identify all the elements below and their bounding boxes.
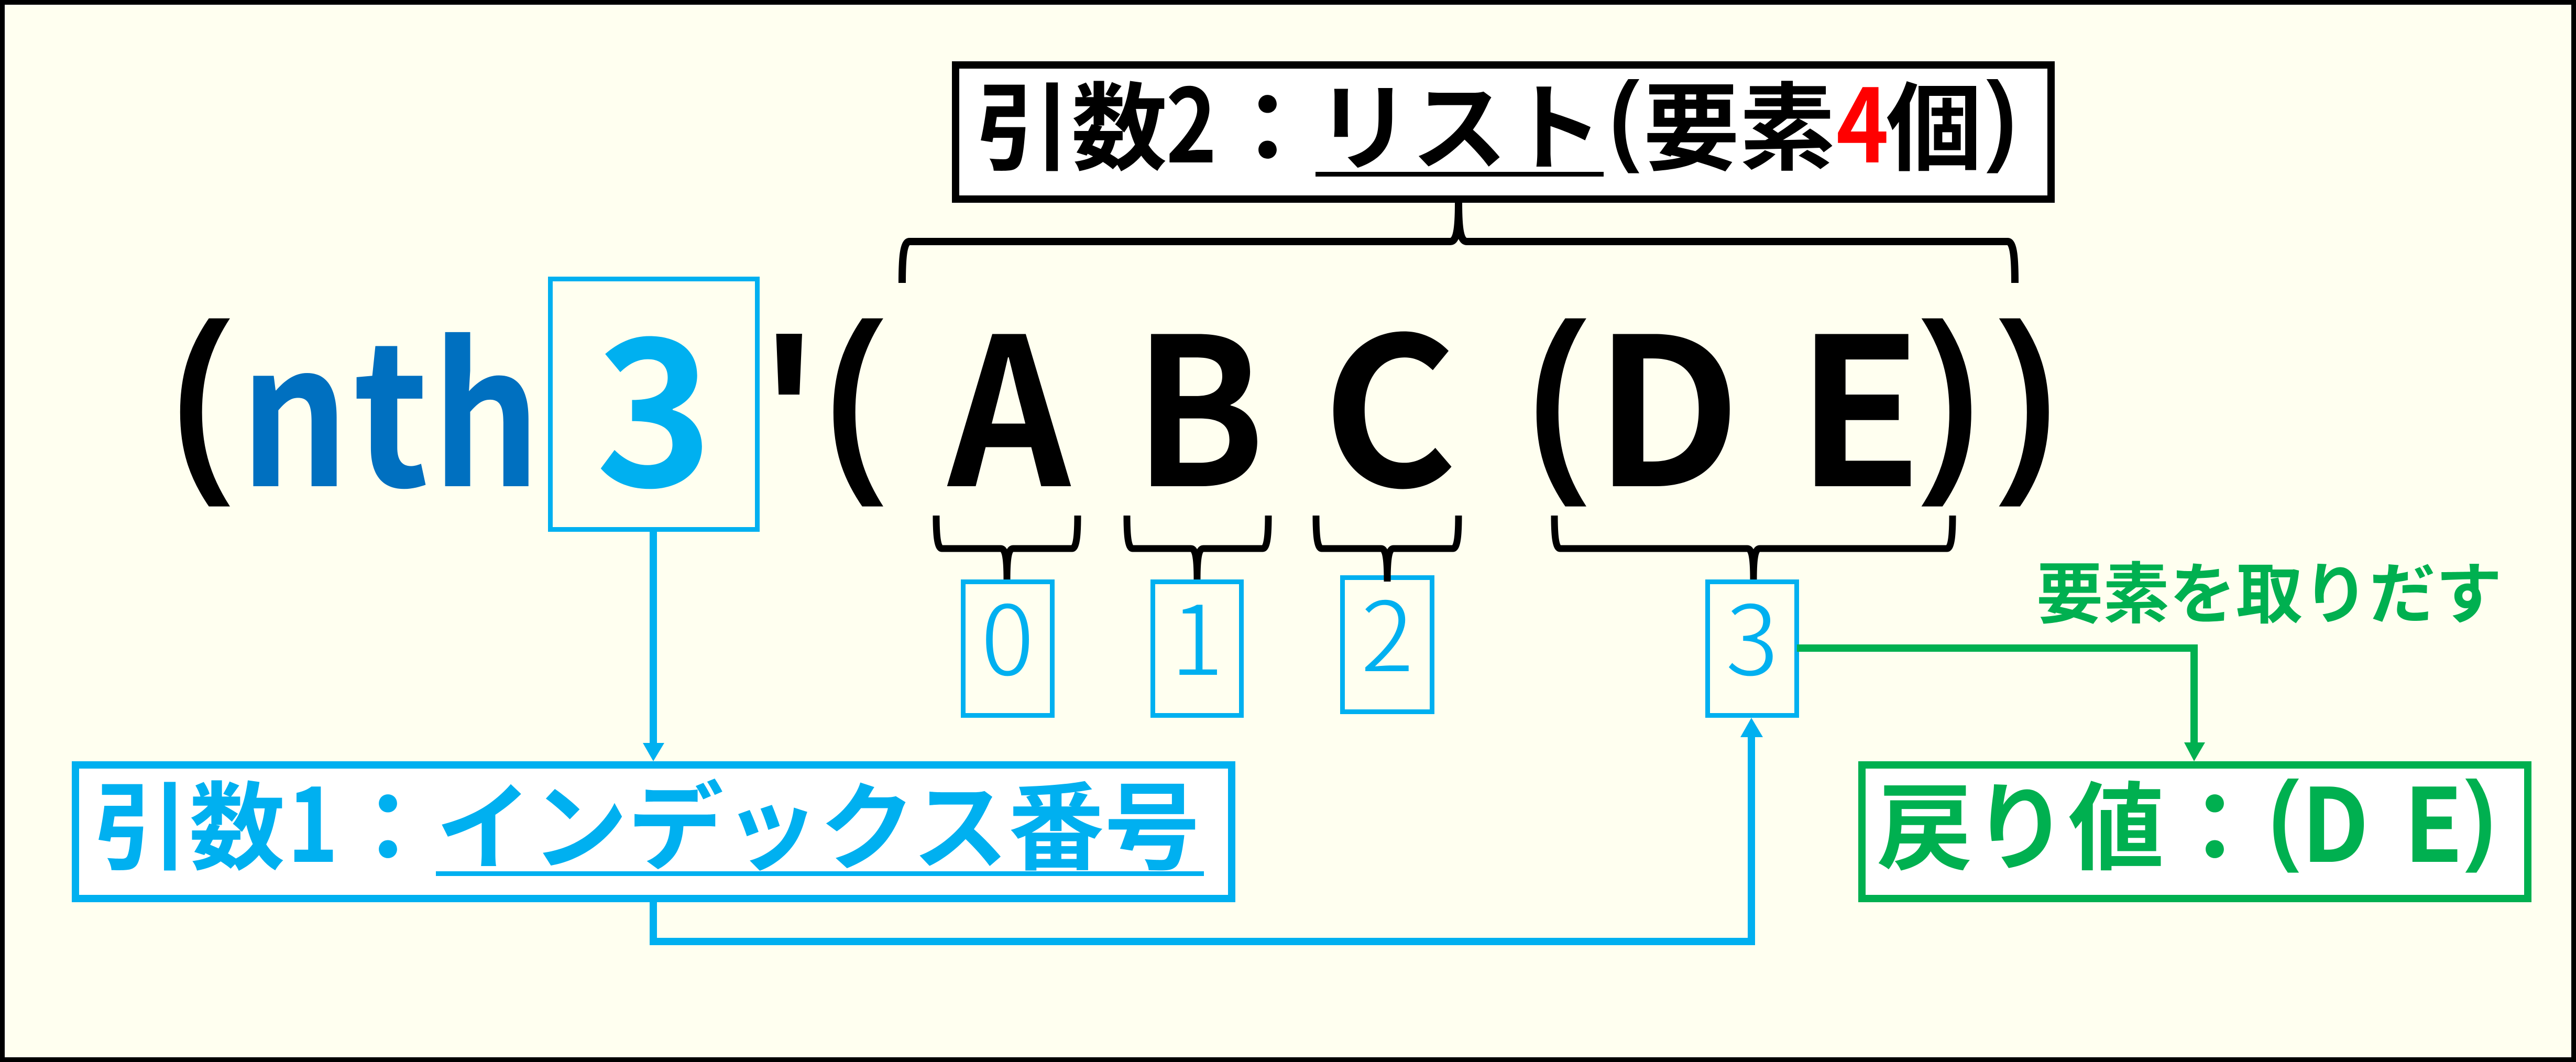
code: opening paren and nth xyxy=(167,257,541,543)
code: quote and list elements: ( xyxy=(820,278,892,512)
code: opening paren and nth: h xyxy=(432,263,541,542)
code: quote and list elements: D xyxy=(1594,248,1741,545)
panel: return value: ) xyxy=(2463,759,2497,874)
panel: argument 2 list label: ： xyxy=(1220,51,1316,190)
index box 3: 3 xyxy=(1725,562,1779,705)
panel: argument 2 list label: 引数 xyxy=(975,51,1167,190)
arrow: argument 1 to index box 3 xyxy=(653,718,1763,941)
arrow: index 3 down to argument 1 xyxy=(643,529,664,761)
index box 1: 1 xyxy=(1170,562,1224,705)
code: quote and list elements: ) xyxy=(1915,278,1985,512)
panel: argument 1 index number label: 1 xyxy=(287,744,338,891)
index box 0: 0 xyxy=(980,562,1035,705)
brace: sublist D E xyxy=(1554,516,1953,579)
code: quote and list elements: ' xyxy=(766,281,812,553)
panel: return value: D xyxy=(2301,744,2369,891)
index box 1 xyxy=(1153,562,1242,716)
panel: return value: 戻り値 xyxy=(1877,751,2164,890)
highlighted index 3 xyxy=(550,256,758,544)
caption: take out element: 要素を取りだす xyxy=(2036,541,2502,637)
panel: return value: ( xyxy=(2267,759,2301,874)
highlighted index 3: 3 xyxy=(596,256,713,544)
brace: element C xyxy=(1316,516,1459,582)
panel: argument 2 list label: 要素 xyxy=(1643,51,1835,190)
code: quote and list elements: A xyxy=(945,248,1073,546)
arrow: index box 3 to return value xyxy=(1797,648,2205,761)
index box 2 xyxy=(1342,559,1432,711)
panel: argument 2 list label xyxy=(956,45,2051,199)
code: opening paren and nth: ( xyxy=(167,278,238,512)
code: quote and list elements: E xyxy=(1796,248,1923,545)
panel: return value: E xyxy=(2404,745,2463,891)
brace: element B xyxy=(1127,516,1268,579)
code: quote and list elements: B xyxy=(1134,248,1265,545)
panel: argument 2 list label: リスト xyxy=(1316,51,1603,190)
panel: argument 1 index number label: 引数 xyxy=(93,751,285,890)
panel: argument 2 list label: 2 xyxy=(1166,45,1217,192)
brace: whole list xyxy=(902,203,2015,283)
index box 3 xyxy=(1708,562,1797,716)
code: quote and list elements: ( xyxy=(1523,278,1595,512)
index box 2: 2 xyxy=(1360,559,1415,701)
panel: argument 2 list label: 4 xyxy=(1836,45,1889,192)
panel: return value xyxy=(1862,744,2528,899)
panel: argument 1 index number label: インデックス番号 xyxy=(436,751,1200,890)
panel: argument 2 list label: ( xyxy=(1607,59,1642,175)
panel: argument 2 list label: ) xyxy=(1984,59,2019,175)
brace: element A xyxy=(936,516,1078,579)
panel: argument 1 index number label: ： xyxy=(340,751,436,890)
panel: argument 1 index number label xyxy=(75,744,1232,899)
code: quote and list elements: ) xyxy=(1993,278,2063,512)
code: quote and list elements xyxy=(766,248,2063,553)
panel: return value: ： xyxy=(2167,751,2263,890)
code: quote and list elements: C xyxy=(1322,248,1457,545)
index box 0 xyxy=(963,562,1052,716)
code: opening paren and nth: t xyxy=(353,257,429,543)
panel: argument 2 list label: 個 xyxy=(1886,51,1982,190)
code: opening paren and nth: n xyxy=(240,258,349,543)
